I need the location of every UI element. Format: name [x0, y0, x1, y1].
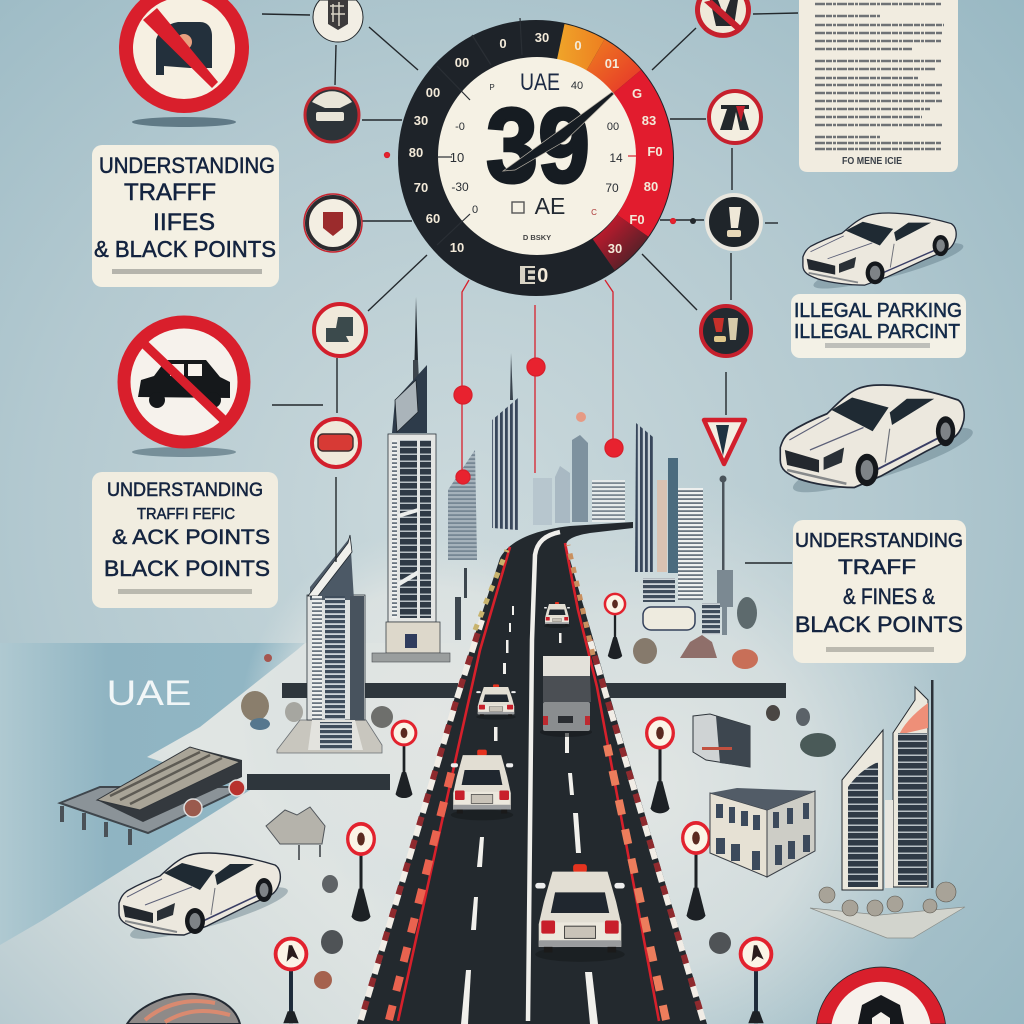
- gauge ring labels: 83: [642, 113, 656, 128]
- left edge checker: [361, 620, 482, 1020]
- panel title text: BLACK POINTS: [104, 556, 270, 581]
- gauge ring labels: [409, 30, 663, 256]
- front tower: [277, 535, 382, 753]
- small sign: right 4: [701, 306, 751, 356]
- gauge UAE heading: UAE: [520, 69, 560, 96]
- small building: [693, 714, 750, 767]
- gauge ticks: [437, 18, 636, 245]
- gauge red segment: [612, 70, 673, 237]
- panel: right title: [793, 520, 966, 663]
- small sign: upper left 2: [305, 88, 359, 142]
- small sign: upper left 1: [313, 0, 363, 42]
- right tower: [893, 687, 928, 887]
- right towers: [810, 680, 965, 938]
- roadside sign 4: [683, 823, 709, 921]
- upper left edge blocks: [475, 550, 507, 630]
- gauge ring labels: 01: [605, 56, 619, 71]
- connector lines: [262, 13, 798, 563]
- panel title text: [104, 480, 270, 581]
- gauge inner labels: 0: [472, 204, 478, 216]
- right red line: [565, 543, 659, 1021]
- small sign: mid left: [314, 304, 366, 356]
- lane dashes: [461, 606, 598, 1024]
- gauge inner labels: [450, 80, 623, 217]
- gauge inner labels: 00: [607, 121, 619, 133]
- ground and coast: [0, 470, 1024, 1024]
- gauge main number: 39: [486, 87, 590, 205]
- panel: lower left title: [92, 472, 278, 608]
- left dashes: [389, 770, 452, 1020]
- panel title text: TRAFFI FEFIC: [137, 506, 235, 523]
- small sign: top right: [695, 0, 751, 38]
- panel: document text: [799, 0, 958, 172]
- gauge red fade segment: [593, 215, 648, 270]
- panel title text: BLACK POINTS: [795, 612, 963, 637]
- car: middle right: [780, 385, 977, 504]
- upper right edge blocks: [568, 545, 593, 655]
- gauge inner labels: P: [489, 83, 495, 92]
- gauge inner labels: -30: [451, 180, 469, 194]
- small sign: upper left 3: [304, 194, 362, 252]
- car: near middle: [451, 750, 513, 820]
- dome lower left: [127, 994, 240, 1024]
- main tower: [372, 297, 450, 662]
- gauge dial face: [438, 57, 636, 255]
- distant skyline: [448, 353, 733, 635]
- gauge: [398, 18, 674, 296]
- panel title text: [794, 300, 962, 343]
- panel title text: TRAFFF: [124, 179, 216, 206]
- gauge ring labels: 30: [414, 113, 428, 128]
- side roads: [247, 683, 786, 790]
- gauge dark ring: [398, 20, 674, 296]
- truck: [540, 656, 592, 737]
- center line: [528, 532, 560, 1021]
- car: front: [535, 864, 625, 962]
- triangular warning sign: [704, 420, 745, 464]
- gauge ring labels: F0: [629, 212, 645, 227]
- panel title text: ILLEGAL PARKING: [794, 300, 962, 322]
- stadium: [60, 747, 245, 845]
- red connector lines with dots: [384, 152, 696, 484]
- left red line: [398, 547, 510, 1021]
- gauge orange-red segment: [586, 39, 641, 94]
- gauge inner labels: -0: [455, 121, 465, 133]
- car: middle distance: [476, 684, 516, 720]
- sign: bottom right: [816, 967, 946, 1024]
- gauge ring labels: F0: [647, 144, 663, 159]
- gauge sub label: [512, 193, 565, 219]
- roadside sign 7: [741, 939, 771, 1023]
- panel title text: IIFES: [153, 209, 215, 236]
- gauge sub label: AE: [535, 193, 565, 219]
- panel title text: [94, 153, 276, 262]
- left tower: [842, 730, 883, 890]
- gauge ring labels: 00: [426, 85, 440, 100]
- panel title text: UNDERSTANDING: [795, 530, 963, 552]
- gauge bottom label: E0: [524, 265, 548, 287]
- sign: top left prohibition: [119, 0, 249, 127]
- panel title text: UNDERSTANDING: [107, 480, 263, 501]
- roadside sign 2: [647, 718, 673, 813]
- gauge needle: [503, 92, 614, 171]
- plinth: [810, 907, 965, 938]
- document footer: FO MENE ICIE: [842, 156, 902, 167]
- roadside sign 5: [605, 594, 625, 659]
- gauge inner labels: 40: [571, 80, 583, 92]
- gauge inner labels: 70: [605, 181, 619, 195]
- street posts near tower: [455, 568, 467, 640]
- gauge inner labels: 10: [450, 150, 464, 165]
- gauge ring labels: 70: [414, 180, 428, 195]
- sign: no car: [124, 322, 244, 457]
- gauge ring labels: 0: [574, 38, 582, 53]
- panel small text: [118, 589, 252, 594]
- panel title text: & FINES &: [843, 584, 935, 609]
- small sign: right 3: [707, 195, 761, 249]
- panel small text: [112, 269, 262, 274]
- gauge ring labels: 30: [608, 241, 622, 256]
- gauge ring labels: 10: [450, 240, 464, 255]
- right dashes: [607, 745, 666, 1020]
- roadside sign 6: [276, 939, 306, 1023]
- gauge ring labels: 80: [409, 145, 423, 160]
- roadside sign 1: [392, 721, 416, 798]
- gauge small text: D BSKY: [523, 233, 551, 242]
- panel small text: [826, 647, 934, 652]
- gauge orange segment: [557, 24, 604, 72]
- scattered city details: [241, 578, 836, 989]
- right edge checker: [590, 640, 703, 1020]
- panel small text: [825, 343, 930, 348]
- gauge ring labels: 00: [455, 55, 469, 70]
- car: small far: [544, 602, 570, 628]
- car: upper right: [803, 213, 967, 297]
- left edge checker red: [361, 620, 482, 1020]
- road: [357, 522, 707, 1024]
- roadside sign 3: [348, 824, 374, 922]
- panel title text: [795, 530, 963, 637]
- panel: illegal parking: [791, 294, 966, 358]
- gauge ring labels: 30: [535, 30, 549, 45]
- classical building: [710, 788, 815, 877]
- document lines: [815, 4, 944, 149]
- car: lower left: [119, 853, 291, 948]
- UAE coast label: UAE: [106, 674, 192, 713]
- panel title text: UNDERSTANDING: [99, 153, 275, 178]
- small sign: right 2: [709, 91, 761, 143]
- panel: upper left title: [92, 145, 279, 287]
- panel title text: ILLEGAL PARCINT: [794, 321, 960, 343]
- gauge ring labels: 60: [426, 211, 440, 226]
- gauge ring labels: G: [632, 86, 642, 101]
- gauge ring labels: 80: [644, 179, 658, 194]
- panel title text: & BLACK POINTS: [94, 236, 276, 262]
- gauge inner labels: C: [591, 208, 597, 217]
- panel title text: & ACK POINTS: [112, 526, 270, 549]
- right edge checker red: [590, 640, 703, 1020]
- gauge inner labels: 14: [609, 151, 623, 165]
- small sign: lower left: [312, 419, 360, 467]
- panel title text: TRAFF: [838, 556, 916, 579]
- gauge ring labels: 0: [499, 36, 507, 51]
